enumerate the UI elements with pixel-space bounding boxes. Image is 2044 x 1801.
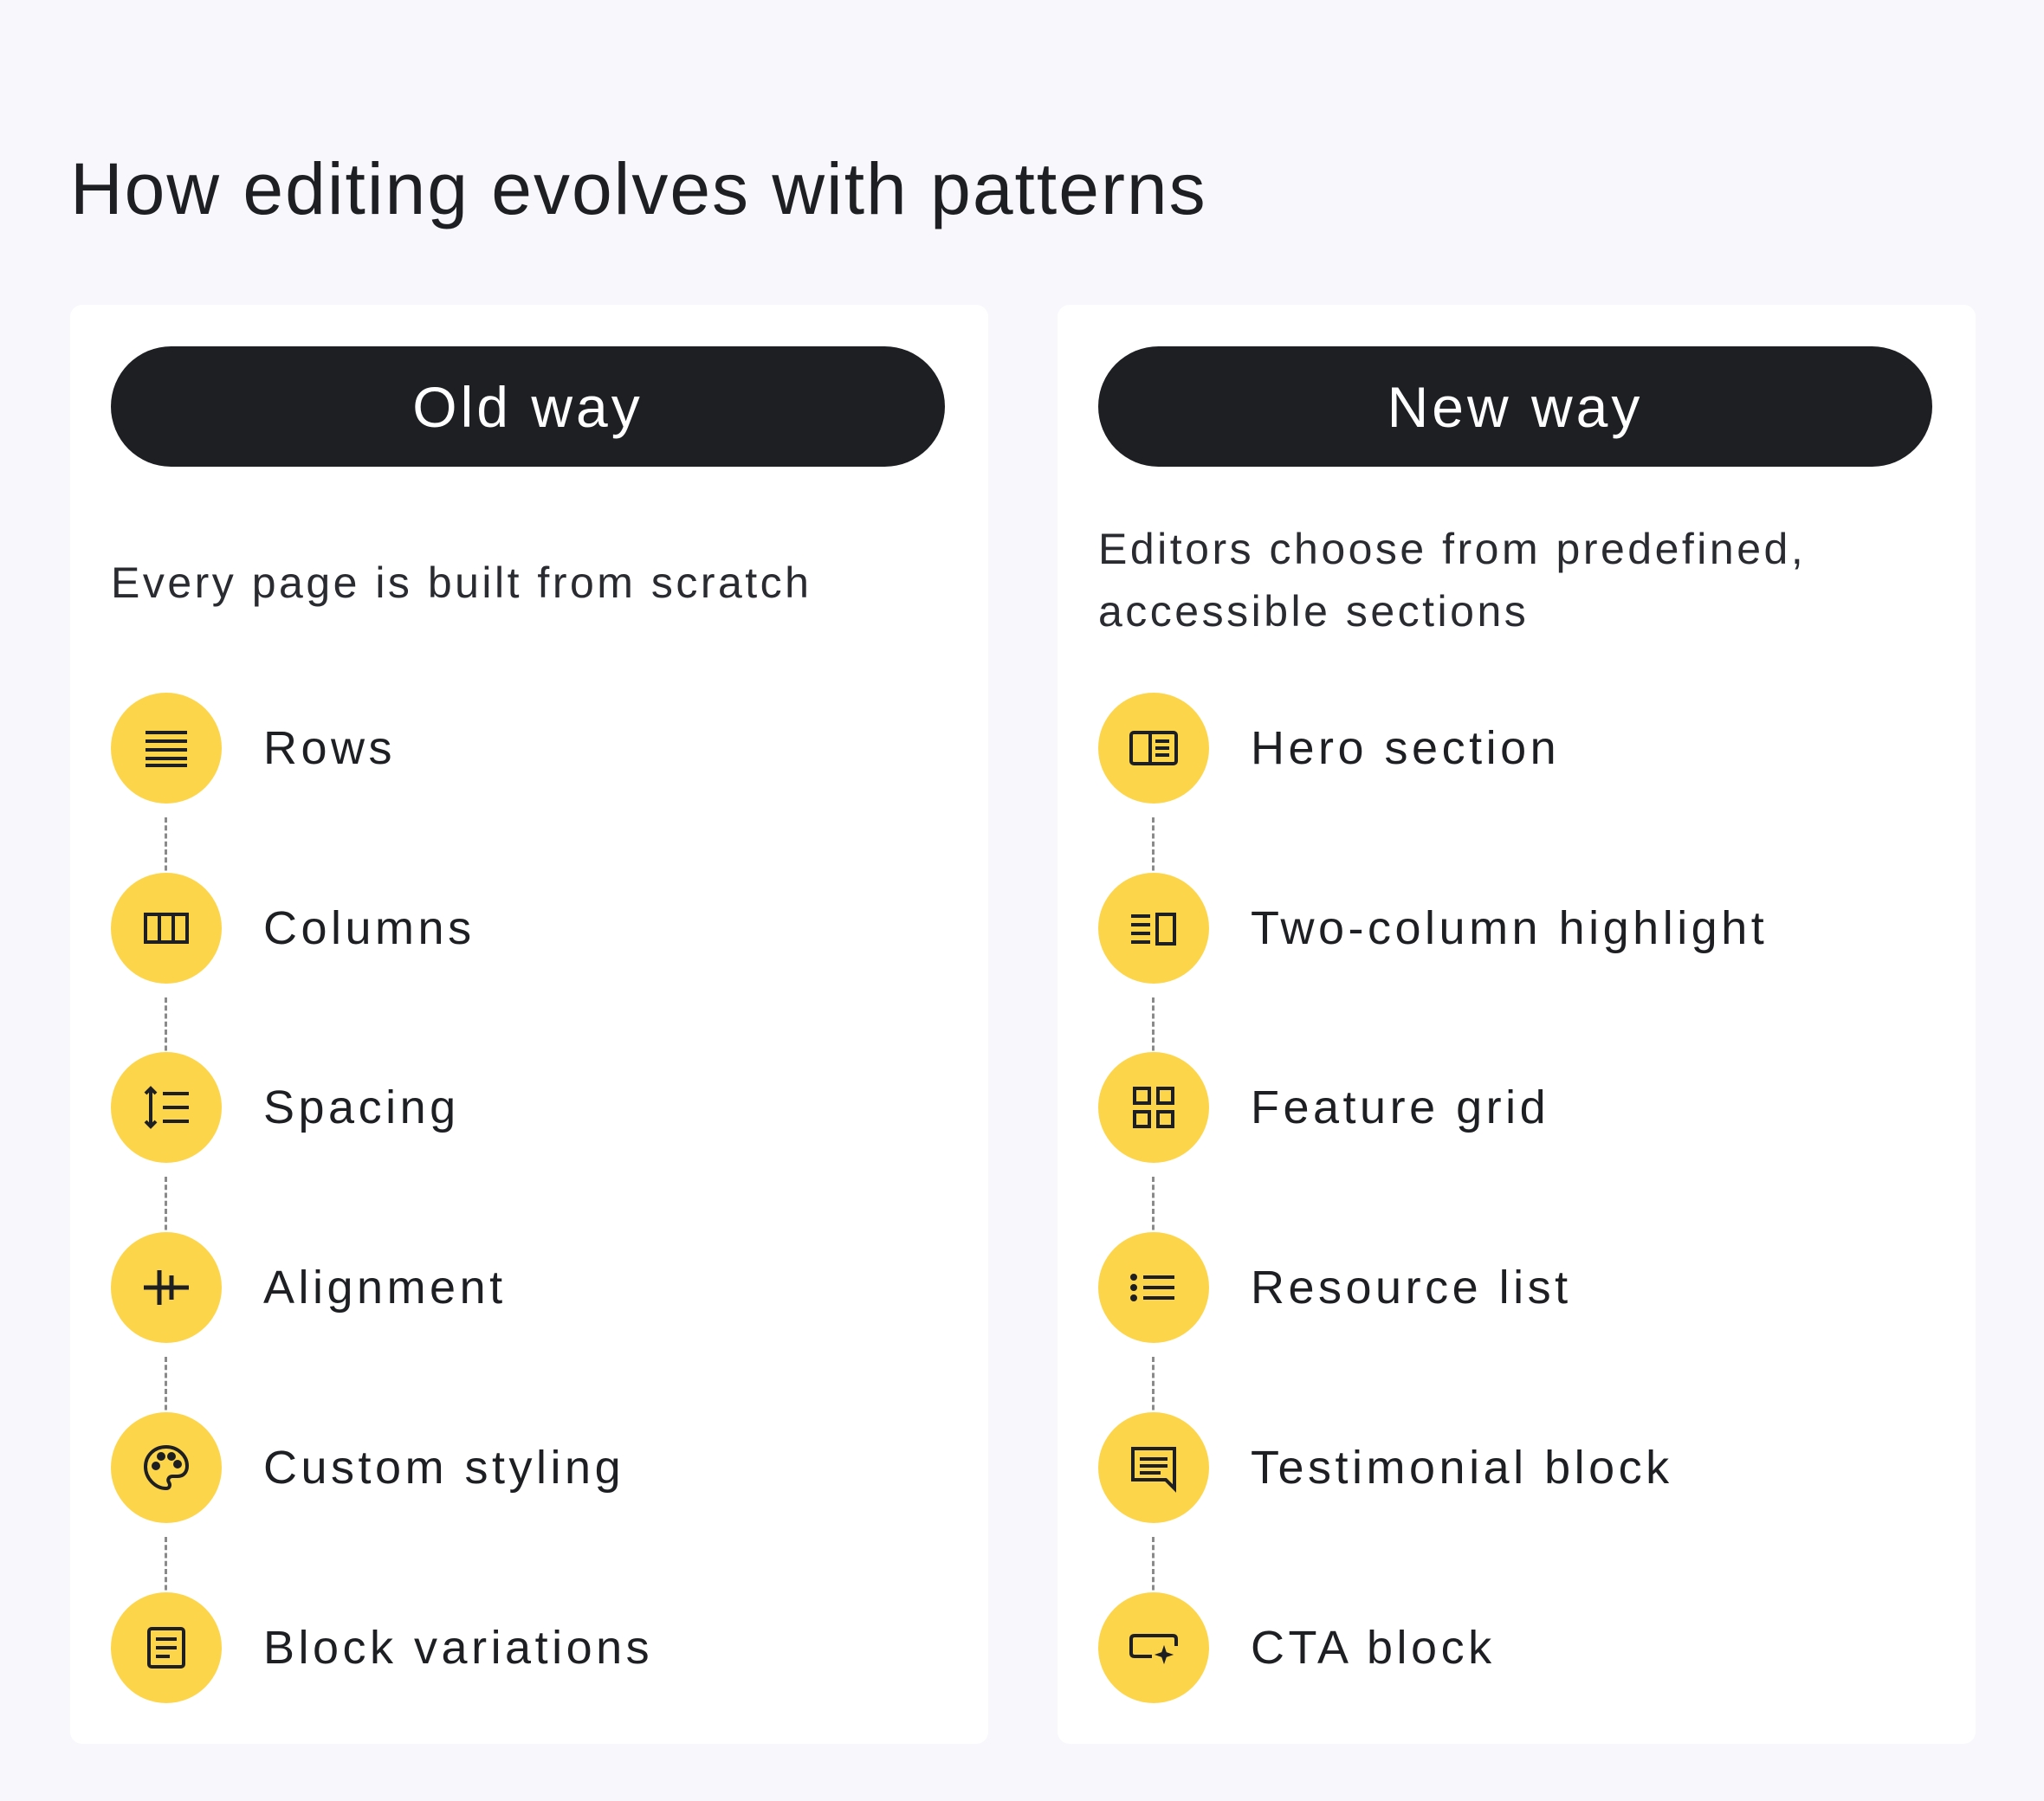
item: two-column highlight: Two-column highlight (1251, 902, 1768, 954)
subtitle: new way: Editors choose from predefined, (1098, 525, 1806, 573)
item: block variations: Block variations (263, 1622, 653, 1674)
heading pill: new way: New way (1387, 374, 1643, 438)
heading pill: old way (111, 346, 945, 467)
panel: new way (1058, 305, 1976, 1744)
item: two-column highlight (1098, 873, 1768, 984)
item: resource list (1098, 1232, 1572, 1343)
panel: old way (70, 305, 988, 1744)
item: feature grid: Feature grid (1251, 1081, 1549, 1133)
item: block variations (111, 1592, 653, 1703)
item: custom styling (111, 1412, 624, 1523)
item: feature grid (1098, 1052, 1549, 1163)
item: hero section (1098, 693, 1560, 804)
item: hero section: Hero section (1251, 722, 1560, 774)
item: rows: Rows (263, 722, 396, 774)
subtitle: new way: accessible sections (1098, 587, 1529, 636)
item: CTA block (1098, 1592, 1496, 1703)
item: testimonial block (1098, 1412, 1673, 1523)
heading pill: old way: Old way (412, 374, 644, 438)
item: alignment (111, 1232, 507, 1343)
item: testimonial block: Testimonial block (1251, 1442, 1673, 1494)
item: columns: Columns (263, 902, 475, 954)
item: CTA block: CTA block (1251, 1622, 1496, 1674)
item: columns (111, 873, 475, 984)
subtitle: new way (1098, 525, 1806, 636)
title: How editing evolves with patterns (70, 148, 1207, 229)
item: rows (111, 693, 396, 804)
item: spacing: Spacing (263, 1081, 460, 1133)
subtitle: old way: Every page is built from scratch (111, 558, 812, 607)
heading pill: new way (1098, 346, 1932, 467)
item: resource list: Resource list (1251, 1262, 1572, 1314)
item: spacing (111, 1052, 460, 1163)
item: alignment: Alignment (263, 1262, 507, 1314)
item: custom styling: Custom styling (263, 1442, 624, 1494)
